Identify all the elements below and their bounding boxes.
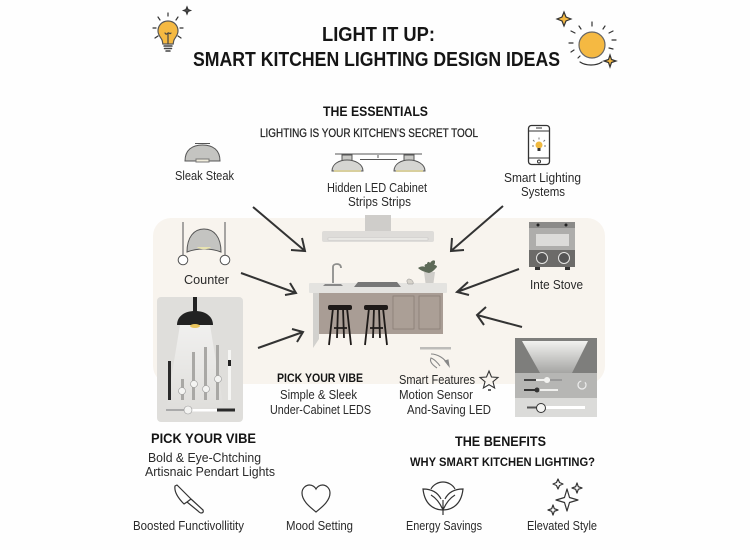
- icon: cabinet lamps: [332, 154, 425, 171]
- label: hidden led cabinet strips: [327, 180, 427, 209]
- label: pick your vibe simple: [270, 371, 371, 417]
- label: smart features: And-Saving LED: [407, 402, 491, 417]
- title: [193, 24, 560, 71]
- label: pick your vibe simple: PICK YOUR VIBE: [277, 371, 363, 385]
- label: smart features: [399, 372, 491, 417]
- icon: stove: [529, 222, 575, 270]
- label: boosted functionality: Boosted Functivollitity: [133, 518, 244, 533]
- arrow: slider panel to island: [258, 329, 303, 348]
- arrow: controls to island: [477, 307, 522, 327]
- title: LIGHT IT UP:: [322, 24, 435, 46]
- icon: star: [480, 371, 498, 390]
- label: smart lighting systems: Smart Lighting: [504, 170, 581, 185]
- panel: kitchen background: [153, 218, 605, 384]
- label: smart features: Motion Sensor: [399, 387, 474, 402]
- icon: leaves: [423, 482, 463, 515]
- label: smart lighting systems: [504, 170, 581, 199]
- label: sleak steak: Sleak Steak: [175, 168, 234, 183]
- label: pick your vibe simple: Under-Cabinet LEDS: [270, 402, 371, 417]
- label: hidden led cabinet strips: Hidden LED Cabinet: [327, 180, 427, 195]
- title: SMART KITCHEN LIGHTING DESIGN IDEAS: [193, 49, 560, 71]
- icon: smartphone: [528, 126, 550, 164]
- heading: the benefits: THE BENEFITS: [455, 433, 546, 449]
- icon: light bulb: [153, 7, 190, 51]
- label: pick your vibe simple: Simple & Sleek: [280, 387, 357, 402]
- heading: pick your vibe: PICK YOUR VIBE: [151, 430, 256, 446]
- label: smart features: Smart Features: [399, 372, 475, 387]
- panel: pendant slider controls: [157, 297, 243, 422]
- icon: heart: [302, 485, 330, 512]
- label: smart lighting systems: Systems: [521, 184, 565, 199]
- text: bold pendant lights: Artisnaic Pendart Lights: [145, 464, 275, 479]
- icon: motion sensor arcs: [420, 347, 451, 368]
- icon: pendant counter lamp: [178, 222, 230, 265]
- icon: ceiling lamp: [185, 144, 220, 162]
- arrow: stove to island: [457, 269, 519, 295]
- arrow: sleak steak to island: [253, 207, 305, 251]
- heading: the essentials: THE ESSENTIALS: [323, 103, 428, 119]
- arrow: counter to island: [241, 273, 296, 295]
- panel: under-cabinet controls: [515, 338, 597, 417]
- label: counter: Counter: [184, 272, 230, 287]
- label: hidden led cabinet strips: Strips Strips: [348, 194, 411, 209]
- arrow: smart lighting to island: [451, 206, 503, 251]
- icon: sparkles: [548, 479, 582, 515]
- kitchen island: [309, 260, 447, 348]
- label: mood setting: Mood Setting: [286, 518, 353, 533]
- label: energy savings: Energy Savings: [406, 518, 482, 533]
- text: bold pendant lights: Bold & Eye-Chtching: [148, 450, 261, 465]
- label: elevated style: Elevated Style: [527, 518, 597, 533]
- text: bold pendant lights: [145, 450, 275, 479]
- icon: sun with sparkles: [557, 12, 616, 67]
- icon: knife: [175, 485, 203, 513]
- label: inte stove: Inte Stove: [530, 277, 583, 292]
- subheading: secret tool: LIGHTING IS YOUR KITCHEN'S SECRET TOOL: [260, 126, 478, 140]
- subheading: why smart kitchen lighting: WHY SMART KITCHEN LIGHTING?: [410, 455, 595, 469]
- range hood: [322, 215, 434, 242]
